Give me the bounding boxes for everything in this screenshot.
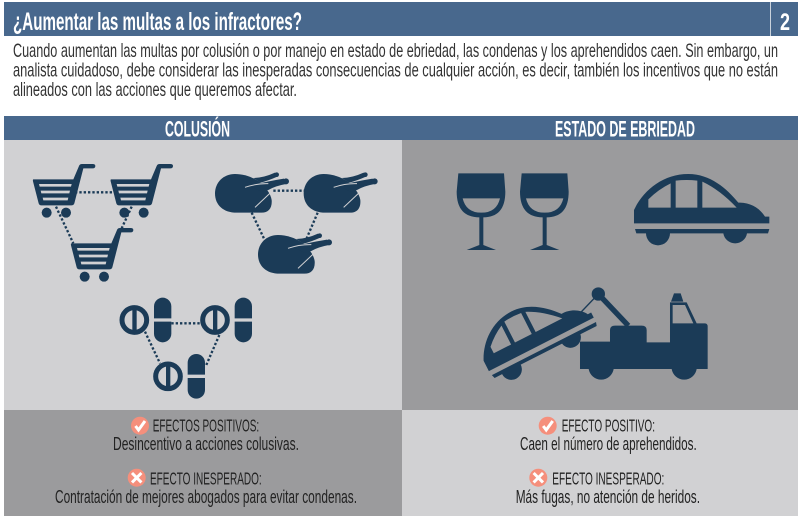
icon: cart 1	[33, 164, 95, 218]
icon: check	[131, 417, 149, 435]
truck	[580, 302, 708, 380]
icon group: chickens	[215, 172, 378, 274]
label: efecto inesperado: EFECTO INESPERADO:	[150, 468, 262, 488]
label: efecto inesperado: EFECTO INESPERADO:	[552, 468, 664, 488]
icon: wine glass 1	[457, 173, 505, 250]
panel: estado de ebriedad	[402, 140, 798, 410]
icon: chicken 1	[215, 172, 289, 213]
towed car	[469, 279, 602, 388]
icon: chicken 2	[304, 172, 378, 213]
panel: efectos colusión	[4, 410, 402, 516]
icon: cross	[529, 469, 547, 487]
title: ¿Aumentar las multas a los infractores?	[13, 8, 302, 36]
icon: pill pair 2	[203, 298, 252, 342]
icon: cart 2	[111, 164, 173, 218]
panel: efectos ebriedad	[402, 410, 798, 516]
text: más fugas: Más fugas, no atención de heridos.	[516, 486, 700, 507]
icon: wine glass 2	[520, 173, 569, 250]
icon group: wine glasses and car	[457, 173, 769, 250]
icon: pill pair 3	[156, 354, 205, 399]
label: efectos positivos: EFECTOS POSITIVOS:	[153, 416, 259, 436]
intro text: alineados con las acciones que queremos afectar.	[13, 79, 297, 101]
heading: colusión: COLUSIÓN	[165, 116, 230, 142]
text: contratación: Contratación de mejores abogados para evitar condenas.	[55, 486, 357, 507]
icon: cross	[128, 469, 146, 487]
icon: tow truck with car	[469, 279, 708, 388]
icon: cart 3	[71, 228, 133, 282]
icon: check	[539, 417, 557, 435]
icon: car	[634, 174, 769, 245]
header bar	[4, 2, 798, 36]
text: desincentivo: Desincentivo a acciones colusivas.	[113, 433, 299, 454]
intro text	[13, 40, 778, 101]
icon: chicken 3	[258, 233, 332, 274]
heading: estado de ebriedad: ESTADO DE EBRIEDAD	[555, 116, 695, 142]
icon group: pills	[122, 298, 252, 399]
page number: 2	[780, 9, 790, 36]
boom	[592, 287, 605, 301]
icon: pill pair 1	[122, 298, 171, 342]
panel: colusión	[4, 140, 402, 410]
label: efecto positivo: EFECTO POSITIVO:	[562, 416, 655, 436]
section header bar	[4, 116, 798, 142]
text: caen: Caen el número de aprehendidos.	[520, 433, 697, 454]
icon group: shopping carts	[33, 164, 173, 282]
